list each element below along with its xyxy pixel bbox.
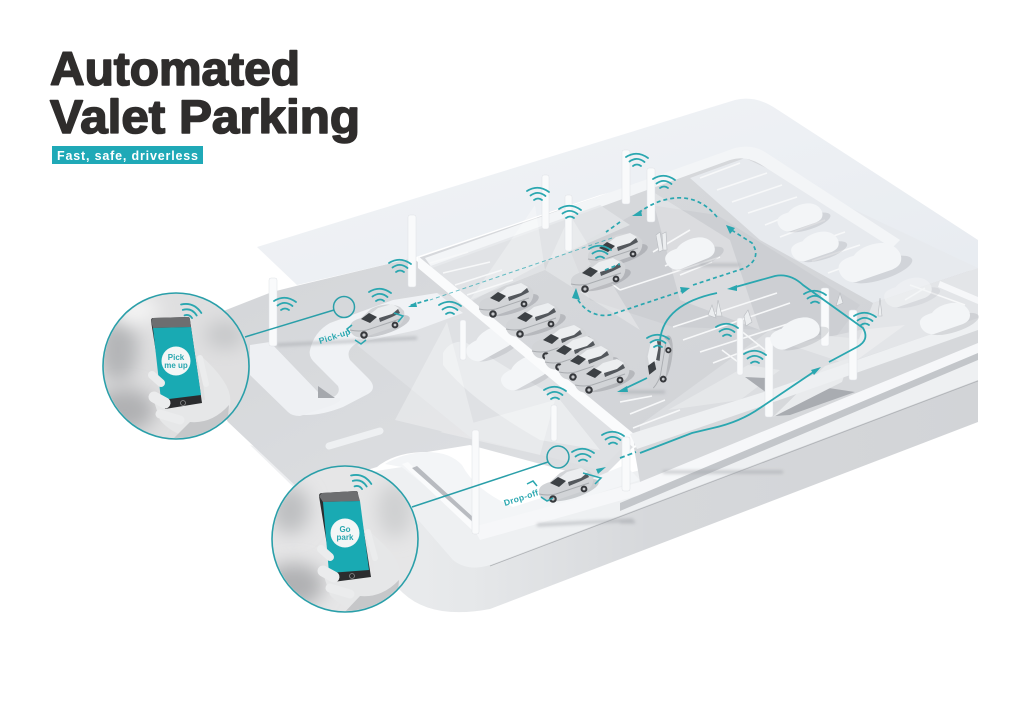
drop-off curb (402, 462, 478, 530)
app button: park (337, 533, 354, 542)
camera cones upper deck (470, 190, 905, 410)
callout: pick me up phone (95, 293, 249, 440)
pick-up parking bay (347, 313, 403, 344)
app button: me up (164, 361, 188, 370)
right end light area (850, 268, 978, 362)
title: Automated (50, 42, 300, 95)
hand (155, 359, 208, 430)
phone (319, 491, 371, 582)
phone (151, 317, 202, 409)
upper deck floor (418, 150, 978, 440)
parking structure illustration (170, 99, 981, 612)
lower curb strip (473, 343, 978, 540)
phone top (319, 491, 360, 502)
top-left deck light region (425, 205, 630, 302)
deck perimeter band (425, 147, 900, 268)
curb dark side (318, 386, 335, 398)
lower level floor (357, 293, 630, 470)
pick-up lane (288, 293, 463, 415)
title (50, 42, 360, 143)
arrowheads (408, 210, 821, 474)
right front deck (640, 295, 978, 435)
silver cars (350, 233, 689, 506)
app button: Go (339, 525, 351, 534)
connector: drop-off phone to driver (412, 446, 569, 507)
home button (350, 574, 354, 578)
slab top (350, 345, 978, 568)
label: pick-up: Pick-up (318, 326, 352, 346)
road surface (170, 258, 640, 490)
phone screen (153, 327, 201, 400)
ramp wedge shadow (745, 377, 855, 416)
parking lines (430, 163, 965, 432)
long shadows (277, 265, 783, 525)
phone screen (323, 501, 369, 573)
app button: Pick (168, 353, 185, 362)
front beam: pick-up side (418, 256, 634, 448)
roof canopy (257, 99, 978, 303)
fingers (152, 358, 206, 420)
app button (162, 346, 190, 376)
app button (330, 518, 360, 548)
title: Valet Parking (50, 90, 360, 143)
right white bar (938, 281, 978, 304)
back-right stall area (690, 158, 978, 303)
hand (325, 578, 332, 594)
slab side (250, 370, 978, 612)
curb shadow (620, 353, 978, 511)
phone top (151, 317, 191, 328)
camera cone lower level (395, 322, 555, 455)
fingers (321, 532, 375, 594)
ghost cars (664, 203, 981, 356)
lower level bays (443, 342, 600, 450)
lower level right (634, 328, 978, 482)
home button (180, 400, 186, 406)
drop-off parking bay (527, 473, 601, 501)
solid route (620, 275, 865, 458)
wifi signal (348, 472, 373, 491)
people (656, 232, 882, 326)
ramp surface (773, 358, 850, 417)
callout: go park phone (264, 466, 418, 615)
drop-off lane (385, 452, 640, 530)
wifi signals (274, 154, 876, 461)
pick-up curb (250, 342, 340, 416)
front beam: right side (630, 318, 978, 449)
dashed route upper (408, 198, 756, 315)
wifi signal (178, 301, 203, 320)
label: drop-off: Drop-off (503, 487, 540, 508)
slab edge line (490, 381, 978, 566)
road marking (329, 431, 380, 446)
connector: pick-up phone to driver (245, 296, 354, 337)
subtitle tag: Fast, safe, driverless (57, 149, 198, 163)
pillars (269, 150, 857, 534)
ghost cars lower level (463, 322, 564, 398)
central aisle (570, 205, 860, 345)
